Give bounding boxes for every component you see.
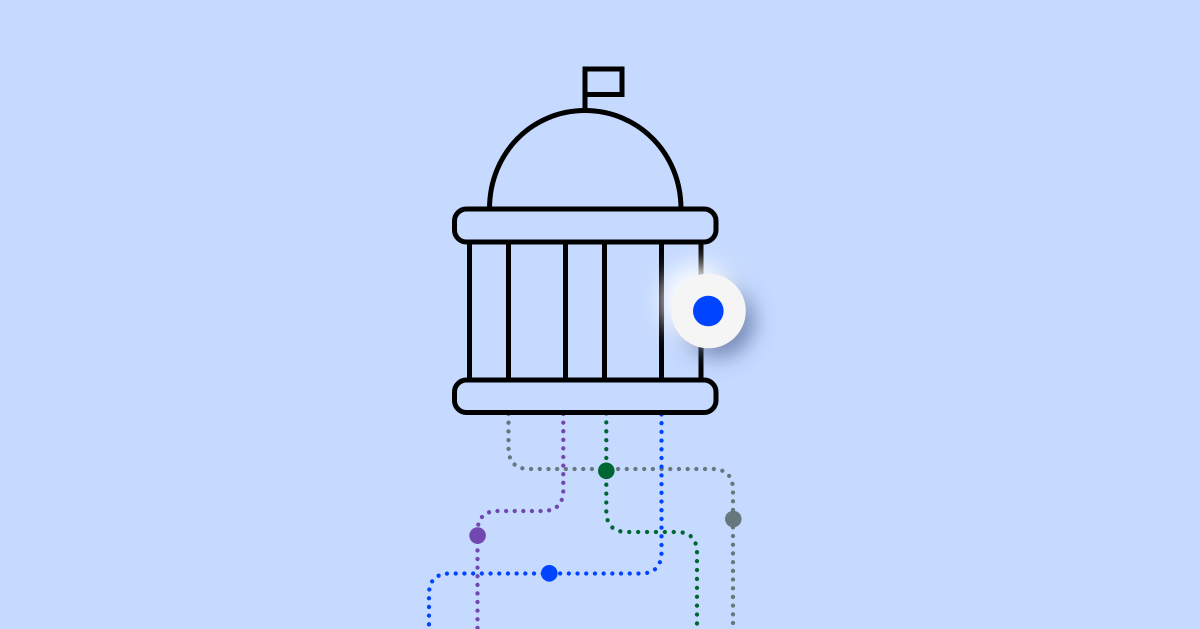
dotted line: purple xyxy=(478,414,563,629)
dotted line: gray xyxy=(508,414,733,629)
node: purple xyxy=(469,527,486,544)
node: blue xyxy=(541,565,558,582)
node: gray xyxy=(725,511,742,527)
node shadow xyxy=(683,286,753,356)
dome xyxy=(490,110,681,209)
node disc xyxy=(671,274,746,348)
icon: government building xyxy=(454,69,716,412)
node: green xyxy=(598,462,615,479)
highlighted node xyxy=(662,265,753,356)
columns xyxy=(470,242,701,380)
flag xyxy=(585,69,622,110)
top beam xyxy=(454,209,716,242)
node glow xyxy=(662,265,734,337)
bottom beam xyxy=(454,380,716,412)
dotted line: green xyxy=(606,414,697,629)
dotted line: blue xyxy=(429,414,662,629)
node center xyxy=(693,296,724,326)
